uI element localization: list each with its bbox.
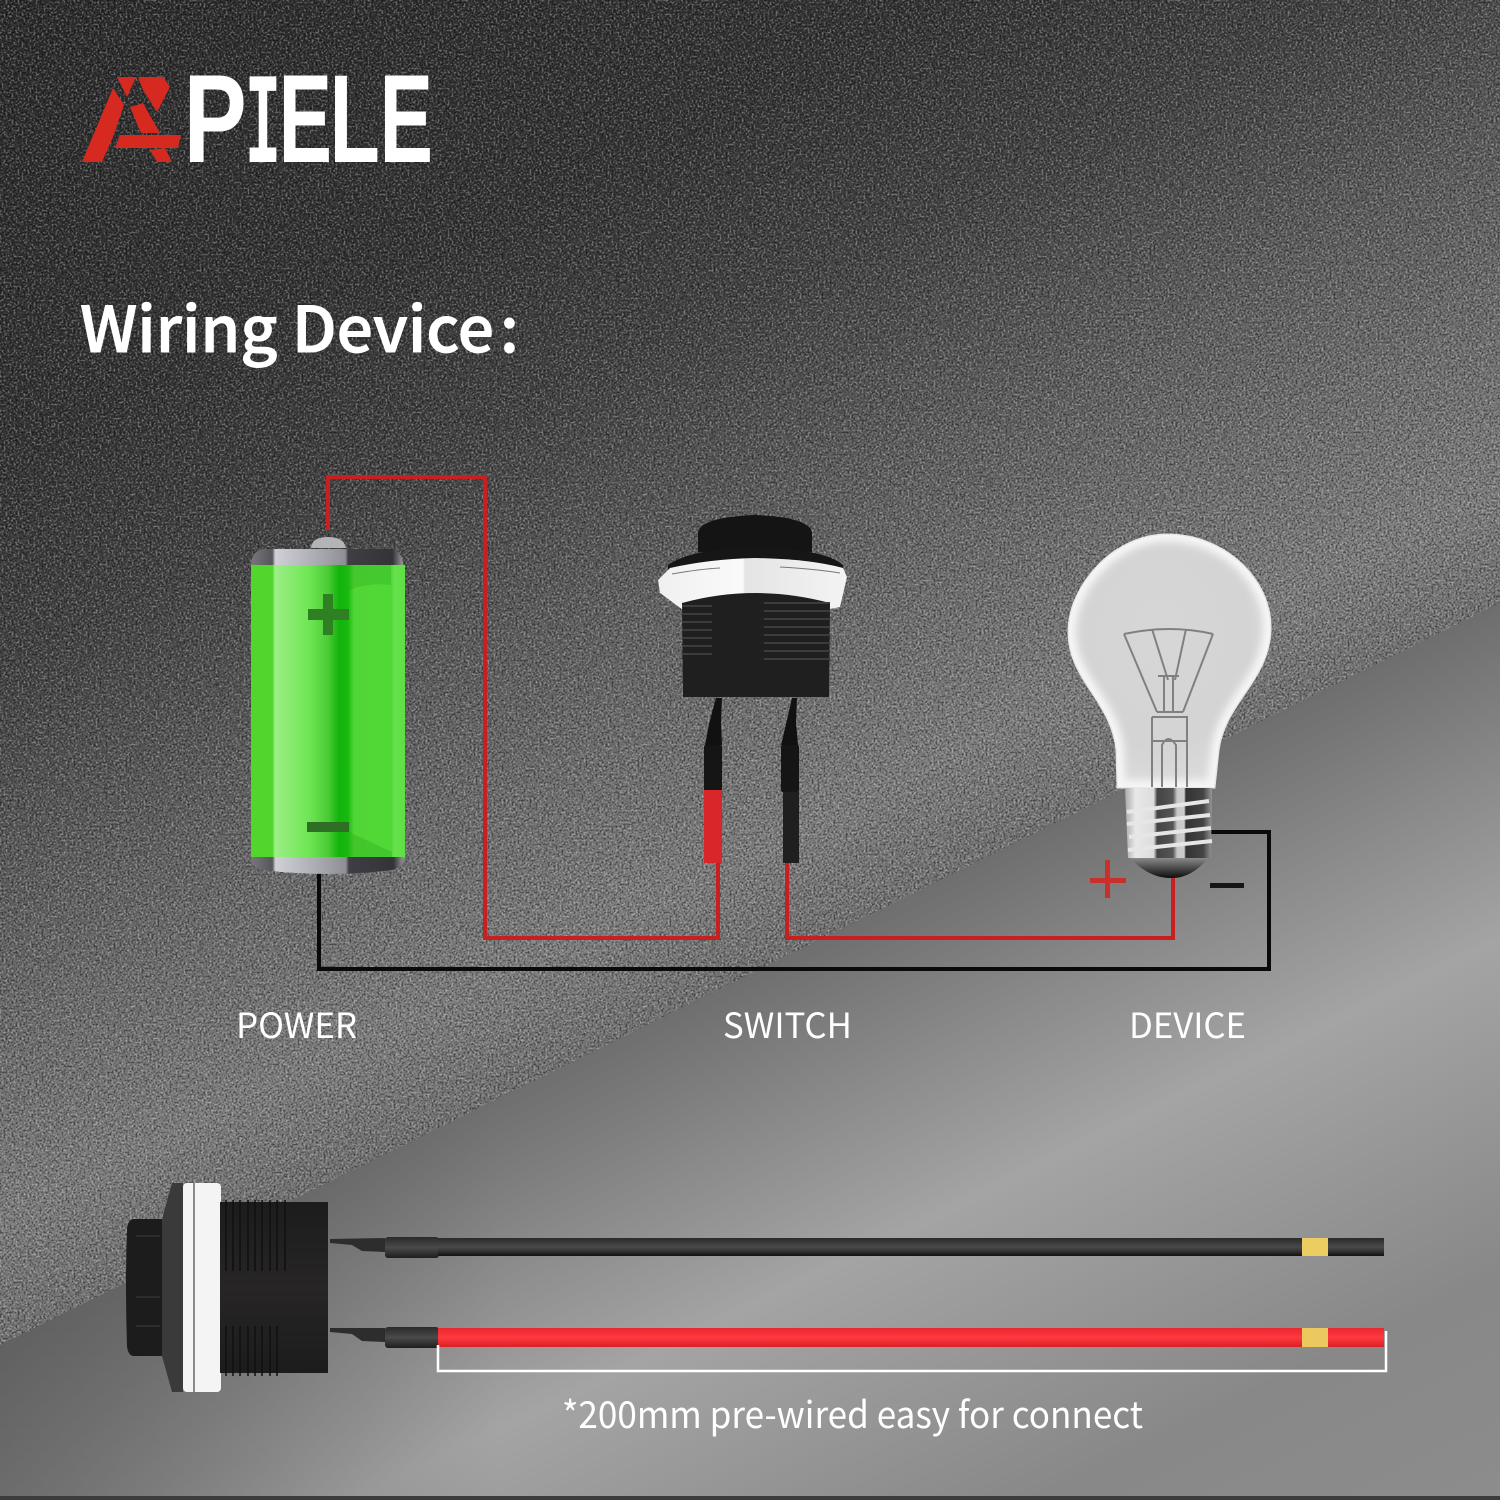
minus sign bbox=[1210, 883, 1244, 888]
logo wordmark: L bbox=[330, 50, 380, 189]
copper tip bbox=[1302, 1328, 1328, 1347]
logo mark bbox=[82, 77, 181, 162]
dimension bracket bbox=[438, 1331, 1386, 1371]
screw base bbox=[1125, 788, 1212, 858]
title: Wiring Device bbox=[80, 280, 494, 371]
black pre-wired lead bbox=[330, 1237, 1384, 1258]
button bbox=[126, 1219, 166, 1356]
label: POWER: POWER bbox=[236, 998, 357, 1049]
threaded body bbox=[220, 1202, 328, 1373]
icon: light bulb bbox=[1069, 535, 1270, 878]
red wire: battery to switch bbox=[328, 477, 718, 938]
copper tip bbox=[1302, 1238, 1328, 1256]
logo wordmark: P bbox=[184, 50, 247, 189]
hex nut bbox=[658, 558, 847, 610]
plus sign bbox=[1090, 860, 1126, 898]
logo wordmark: E bbox=[279, 50, 332, 189]
right lead bbox=[781, 698, 798, 745]
washer bbox=[183, 1183, 221, 1392]
black wire: battery to bulb bbox=[319, 832, 1269, 969]
side view switch bbox=[126, 1183, 328, 1392]
flange bbox=[162, 1183, 183, 1392]
label: DEVICE: DEVICE bbox=[1129, 998, 1246, 1049]
left lead bbox=[705, 698, 722, 745]
title: : bbox=[500, 280, 519, 371]
logo wordmark: I bbox=[245, 55, 281, 202]
minus sign bbox=[307, 822, 349, 832]
logo wordmark bbox=[184, 50, 433, 202]
red wire: switch to bulb bbox=[787, 862, 1173, 938]
plus sign bbox=[308, 594, 349, 635]
button cap bbox=[698, 515, 812, 552]
flange bbox=[668, 547, 843, 572]
caption: *200mm pre-wired easy for connect bbox=[562, 1385, 1143, 1439]
label: SWITCH: SWITCH bbox=[723, 998, 852, 1049]
logo wordmark: E bbox=[380, 50, 433, 189]
icon: battery bbox=[251, 537, 405, 874]
logo: APIELE bbox=[82, 50, 433, 202]
red pre-wired lead bbox=[330, 1327, 1384, 1348]
threaded body bbox=[682, 593, 830, 697]
icon: switch bbox=[658, 515, 847, 863]
